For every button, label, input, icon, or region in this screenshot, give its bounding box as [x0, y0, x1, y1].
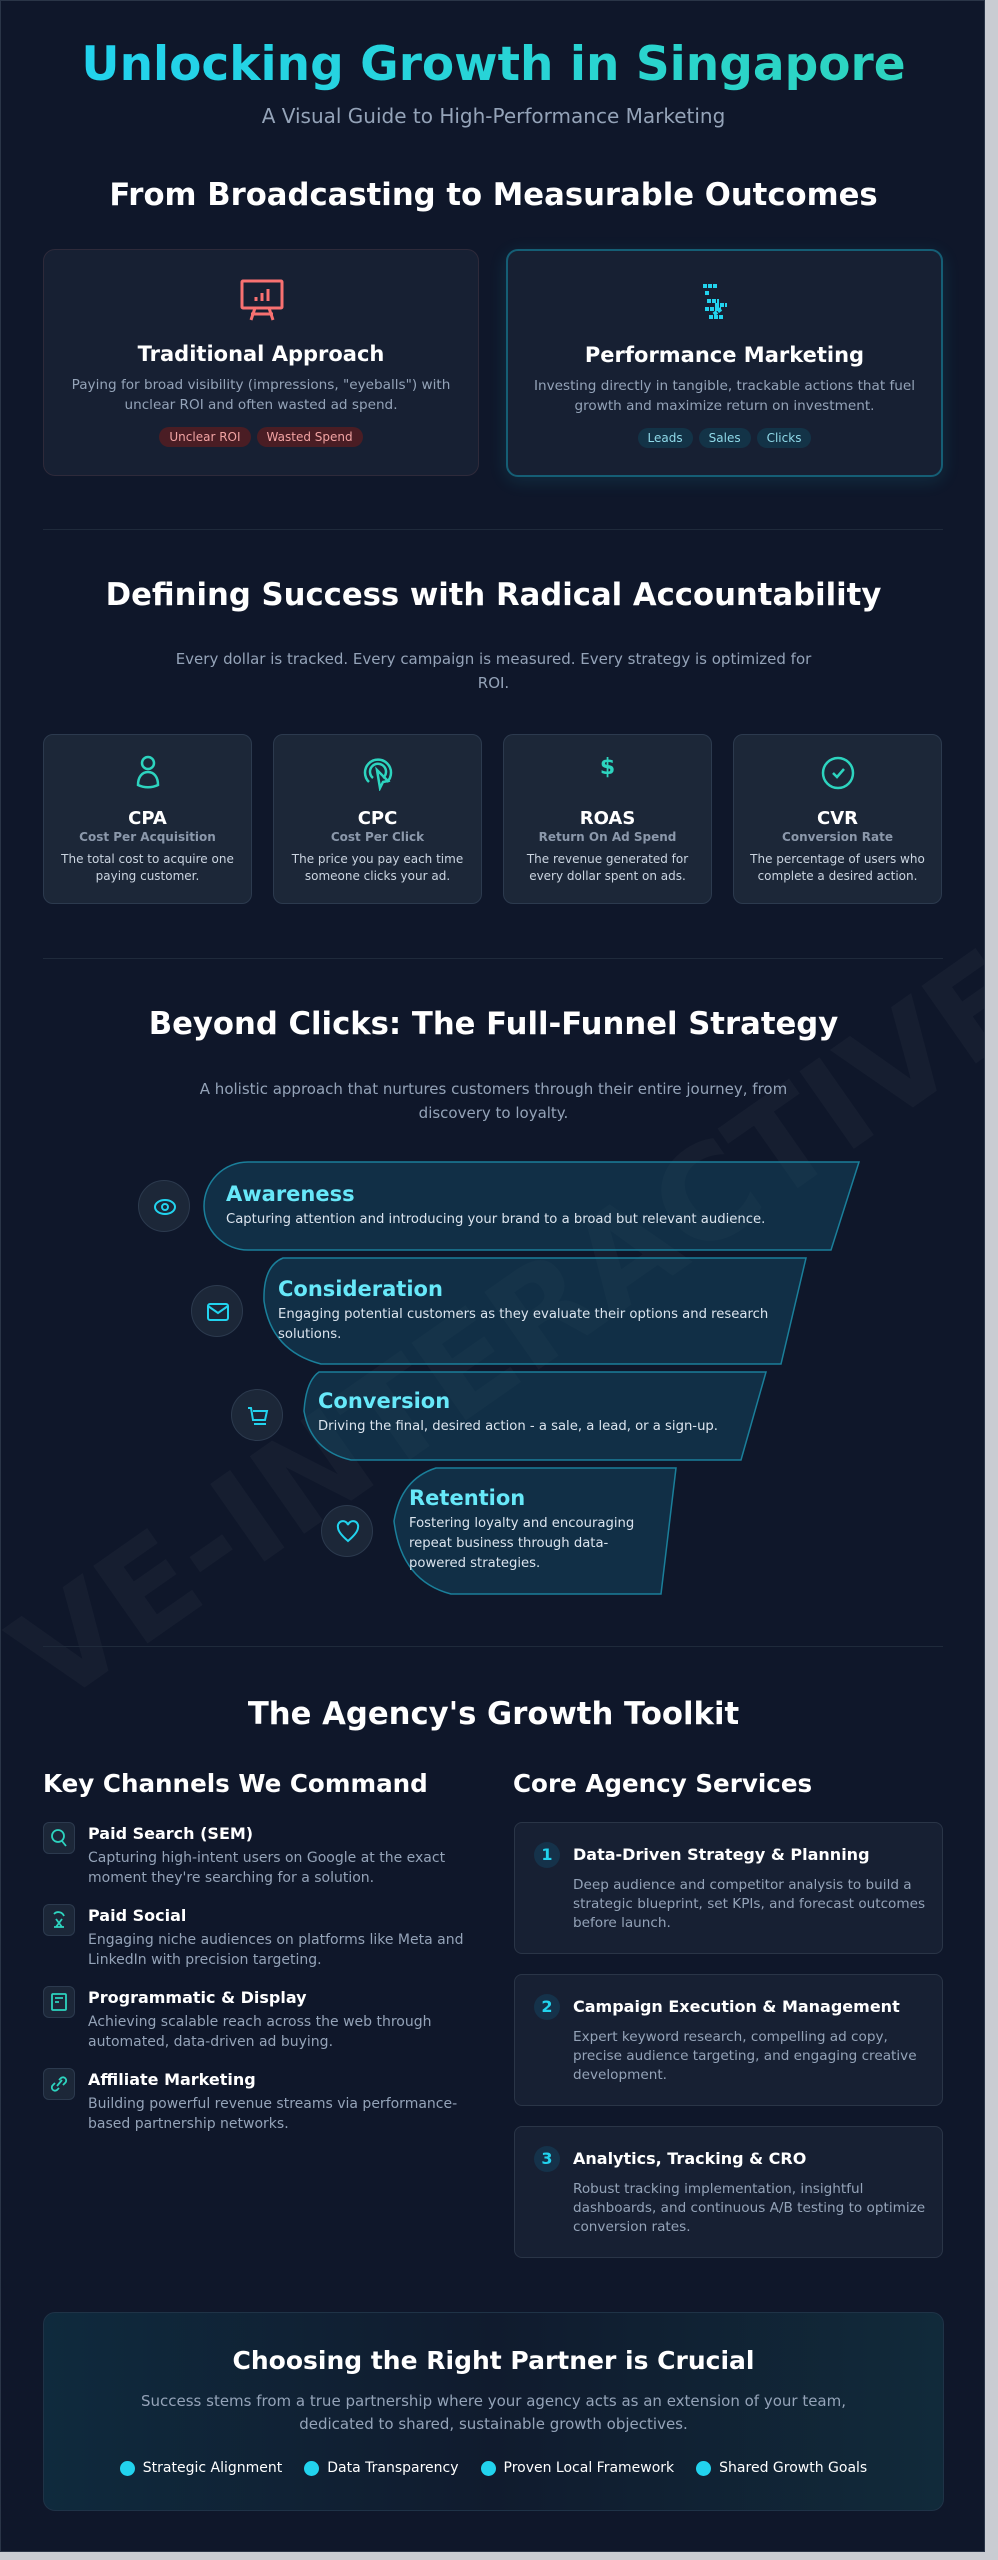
channel: paid social: [43, 1904, 463, 1968]
panel: traditional: Unclear ROI: [169, 430, 241, 444]
panel: traditional: Wasted Spend: [267, 430, 353, 444]
checklist: Strategic Alignment: [143, 2460, 282, 2476]
heading: defining success: Defining Success with Radical Accountability: [106, 578, 881, 613]
channel: paid social: Paid Social: [88, 1906, 186, 1925]
funnel: retention: Fostering loyalty and encouraging repeat business through data-powered strategies.: [409, 1516, 634, 1571]
metric: CPA: [43, 734, 252, 904]
channel: paid social: Engaging niche audiences on platforms like Meta and LinkedIn with precision targeting.: [88, 1932, 463, 1968]
panel: performance: Leads: [648, 431, 683, 445]
panel: performance: [506, 249, 943, 477]
heading: key channels: Key Channels We Command: [43, 1769, 428, 1798]
service 2: Campaign Execution & Management: [573, 1997, 900, 2016]
funnel: awareness: Awareness: [226, 1182, 355, 1206]
metric: ROAS: [503, 734, 712, 904]
panel: performance: Investing directly in tangible, trackable actions that fuel growth and maximize return on investment.: [534, 378, 915, 414]
service 3: 3: [541, 2149, 553, 2168]
checklist: [120, 2460, 867, 2476]
funnel bands: [203, 1161, 860, 1595]
icon: heart: [321, 1505, 373, 1557]
metric: CVR: CVR: [817, 808, 858, 829]
funnel: conversion: Conversion: [318, 1389, 450, 1413]
panel: performance: Performance Marketing: [585, 343, 864, 367]
checklist: Shared Growth Goals: [719, 2460, 867, 2476]
panel: partner: Success stems from a true partnership where your agency acts as an extension of your team, dedicated to shared, sustainable growth objectives.: [141, 2392, 846, 2433]
service 1: Deep audience and competitor analysis to build a strategic blueprint, set KPIs, and forecast outcomes before launch.: [573, 1877, 925, 1931]
panel: partner: [43, 2312, 944, 2511]
funnel: retention: [321, 1486, 634, 1571]
metric: CPC: [273, 734, 482, 904]
heading: funnel: Beyond Clicks: The Full-Funnel Strategy: [149, 1007, 838, 1042]
service 3: Robust tracking implementation, insightful dashboards, and continuous A/B testing to optimize conversion rates.: [573, 2181, 925, 2235]
subtitle: A Visual Guide to High-Performance Marketing: [262, 104, 725, 128]
service 1: [514, 1822, 943, 1954]
panel: traditional: Paying for broad visibility (impressions, "eyeballs") with unclear ROI and often wasted ad spend.: [72, 377, 450, 413]
metric: CPA: The total cost to acquire one paying customer.: [61, 852, 234, 883]
panel: performance: Sales: [709, 431, 741, 445]
service 3: [514, 2126, 943, 2258]
metric: CVR: The percentage of users who complete a desired action.: [750, 852, 925, 883]
metric: ROAS: The revenue generated for every dollar spent on ads.: [527, 852, 688, 883]
panel: traditional: [43, 249, 479, 476]
panel: traditional: Traditional Approach: [138, 342, 384, 366]
service 1: 1: [541, 1845, 553, 1864]
icon: cart: [231, 1389, 283, 1441]
channel: paid search: Paid Search (SEM): [88, 1824, 253, 1843]
icon: eye: [138, 1180, 190, 1232]
checklist: Data Transparency: [327, 2460, 458, 2476]
icon: presentation: [240, 280, 284, 320]
panel: performance: Clicks: [767, 431, 801, 445]
channel: affiliate: Building powerful revenue streams via performance-based partnership networks.: [88, 2096, 457, 2132]
text: funnel intro: A holistic approach that nurtures customers through their entire journey, from discovery to loyalty.: [200, 1080, 787, 1122]
funnel: consideration: Engaging potential customers as they evaluate their options and research solutions.: [278, 1307, 768, 1342]
channel: affiliate: [43, 2068, 457, 2132]
channel: programmatic: Achieving scalable reach across the web through automated, data-driven ad buying.: [88, 2014, 432, 2050]
channel: affiliate: Affiliate Marketing: [88, 2070, 256, 2089]
channel: programmatic: Programmatic & Display: [88, 1988, 307, 2007]
service 2: [514, 1974, 943, 2106]
metric: CVR: Conversion Rate: [782, 830, 893, 844]
service 3: Analytics, Tracking & CRO: [573, 2149, 806, 2168]
icon: growth: [703, 284, 727, 319]
channel: paid search: Capturing high-intent users on Google at the exact moment they're searching for a solution.: [88, 1850, 445, 1886]
service 2: 2: [541, 1997, 553, 2016]
metric: CPA: Cost Per Acquisition: [79, 830, 216, 844]
service 2: Expert keyword research, compelling ad copy, precise audience targeting, and engaging creative development.: [573, 2029, 917, 2083]
icon: mail: [191, 1285, 243, 1337]
title: Unlocking Growth in Singapore: [81, 37, 906, 92]
metric: CVR: [733, 734, 942, 904]
panel: partner: Choosing the Right Partner is Crucial: [233, 2346, 754, 2375]
metric: CPC: The price you pay each time someone clicks your ad.: [292, 852, 463, 883]
heading: core services: Core Agency Services: [513, 1769, 812, 1798]
metric: CPA: CPA: [128, 808, 167, 829]
funnel: awareness: Capturing attention and introducing your brand to a broad but relevant audience.: [226, 1212, 765, 1227]
metric: ROAS: $: [600, 755, 615, 780]
channel: paid search: [43, 1822, 445, 1886]
heading: broadcasting: From Broadcasting to Measurable Outcomes: [109, 178, 878, 213]
metric: CPC: CPC: [358, 808, 397, 829]
service 1: Data-Driven Strategy & Planning: [573, 1845, 870, 1864]
checklist: Proven Local Framework: [504, 2460, 674, 2476]
funnel: consideration: [191, 1277, 768, 1342]
funnel: awareness: [138, 1180, 765, 1232]
metric: CPC: Cost Per Click: [331, 830, 424, 844]
metric: ROAS: Return On Ad Spend: [539, 830, 676, 844]
funnel: retention: Retention: [409, 1486, 525, 1510]
funnel: conversion: Driving the final, desired action - a sale, a lead, or a sign-up.: [318, 1419, 718, 1434]
funnel: consideration: Consideration: [278, 1277, 443, 1301]
text: accountability intro: Every dollar is tracked. Every campaign is measured. Every strategy is optimized for ROI.: [176, 650, 811, 692]
funnel: conversion: [231, 1389, 718, 1441]
channel: programmatic: [43, 1986, 432, 2050]
heading: toolkit: The Agency's Growth Toolkit: [248, 1697, 739, 1732]
metric: ROAS: ROAS: [580, 808, 635, 829]
